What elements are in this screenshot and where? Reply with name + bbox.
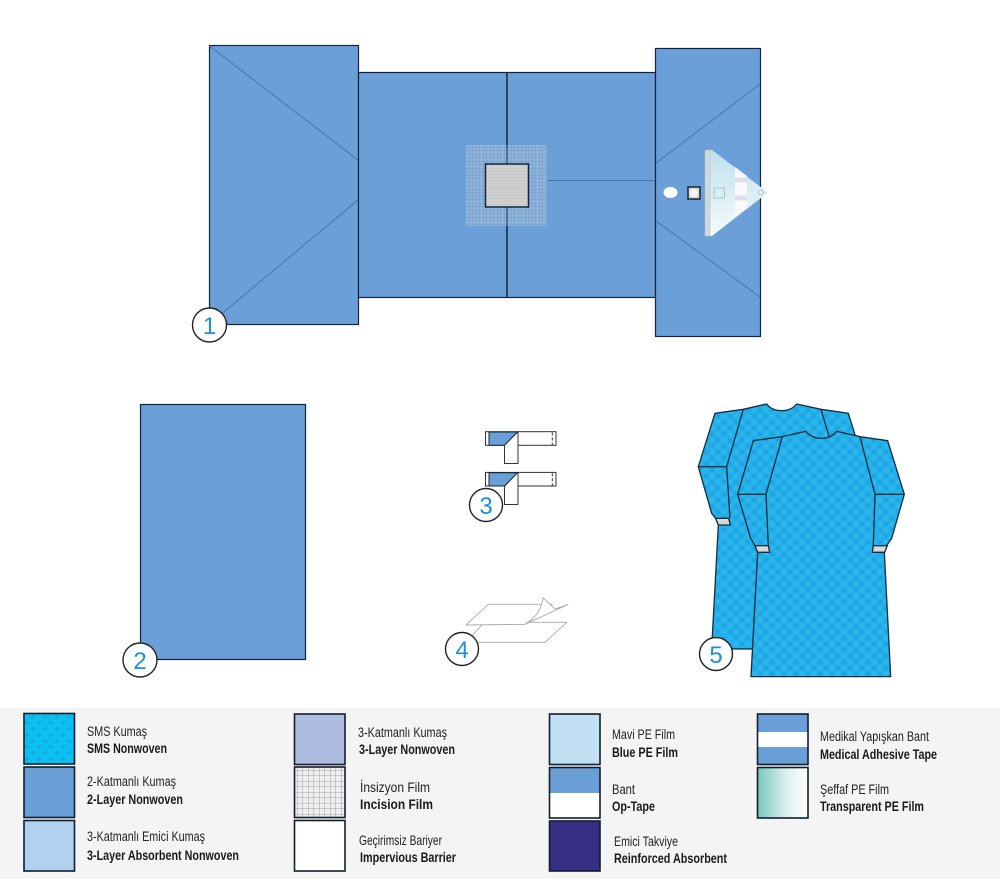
legend: Blue PE Film: Blue PE Film (612, 745, 678, 760)
number 3 (470, 488, 502, 522)
number 2: 2 (133, 648, 147, 675)
diagram 4: impervious sheets (466, 598, 568, 642)
legend: 3-Layer Absorbent Nonwoven: 3-Layer Absorbent Nonwoven (87, 848, 239, 863)
legend: Medical Adhesive Tape: Medikal Yapışkan Bant (820, 729, 929, 744)
legend: 2-Layer Nonwoven: 2-Layer Nonwoven (87, 792, 183, 807)
legend: Op-Tape: Bant (612, 782, 635, 797)
number 5: 5 (709, 642, 723, 669)
legend: Incision Film: İnsizyon Film (360, 780, 430, 795)
oval opening (664, 187, 678, 198)
rear gown (698, 404, 882, 649)
number 4: 4 (455, 637, 469, 664)
tape top (486, 432, 556, 464)
legend: Op-Tape: Op-Tape (612, 799, 655, 814)
front gown (738, 431, 904, 677)
legend: 3-Layer Absorbent Nonwoven (24, 820, 239, 871)
legend: 2-Layer Nonwoven: 2-Katmanlı Kumaş (87, 774, 176, 789)
tape bottom (486, 472, 556, 504)
legend: SMS Nonwoven: SMS Nonwoven (87, 741, 167, 756)
incision film (466, 145, 547, 226)
legend: Impervious Barrier: Impervious Barrier (360, 850, 457, 865)
legend: Reinforced Absorbent (550, 821, 727, 871)
legend: SMS Nonwoven (24, 714, 167, 764)
legend: Impervious Barrier: Geçirimsiz Bariyer (359, 833, 442, 848)
legend: 3-Layer Nonwoven (294, 714, 455, 764)
number 3: 3 (479, 493, 493, 520)
legend: Transparent PE Film: Transparent PE Film (820, 799, 924, 814)
legend: Op-Tape (550, 768, 655, 818)
legend panel (0, 708, 1000, 879)
legend: 2-Layer Nonwoven (24, 767, 183, 818)
right drape panel (656, 48, 760, 336)
legend: Blue PE Film: Mavi PE Film (612, 727, 675, 742)
legend: Blue PE Film (550, 714, 678, 764)
legend: Medical Adhesive Tape: Medical Adhesive Tape (820, 747, 937, 762)
legend: Reinforced Absorbent: Reinforced Absorbent (614, 851, 727, 866)
transparent film pouch (705, 150, 768, 236)
legend: Transparent PE Film (758, 768, 924, 818)
number 2 (123, 643, 157, 677)
diagram 1: surgical drape (210, 46, 768, 336)
number 5 (700, 638, 732, 670)
legend: Incision Film (294, 767, 433, 818)
number 1 (192, 308, 226, 342)
center drape panel (358, 72, 656, 298)
legend: 3-Layer Absorbent Nonwoven: 3-Katmanlı Emici Kumaş (87, 829, 205, 844)
diagram 3: op-tapes (486, 432, 556, 504)
number 1: 1 (203, 313, 216, 340)
legend: Reinforced Absorbent: Emici Takviye (614, 834, 678, 849)
small square port (688, 187, 700, 199)
diagram 2: drape sheet (140, 404, 306, 660)
legend: Medical Adhesive Tape (758, 714, 937, 764)
legend: Transparent PE Film: Şeffaf PE Film (820, 782, 889, 797)
legend: Incision Film: Incision Film (360, 797, 433, 812)
number 4 (446, 632, 478, 666)
diagram 5: surgical gowns (698, 404, 904, 677)
left drape panel (210, 46, 358, 324)
legend: 3-Layer Nonwoven: 3-Katmanlı Kumaş (358, 725, 447, 740)
legend: 3-Layer Nonwoven: 3-Layer Nonwoven (359, 742, 455, 757)
legend: SMS Nonwoven: SMS Kumaş (87, 724, 147, 739)
legend: Impervious Barrier (294, 820, 457, 871)
